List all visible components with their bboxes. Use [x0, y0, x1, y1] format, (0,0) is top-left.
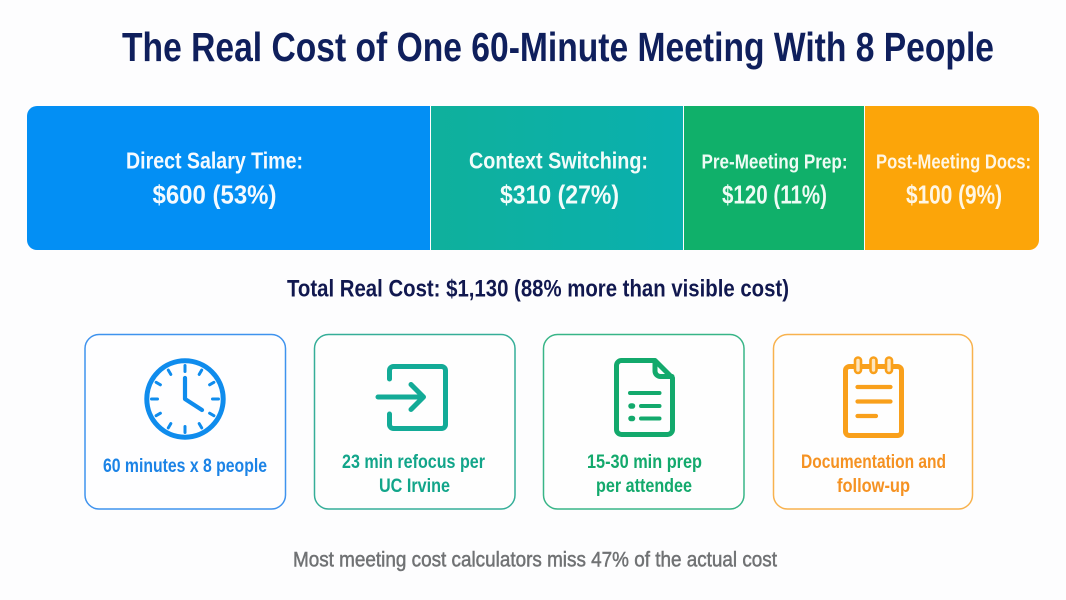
total real cost: Total Real Cost: $1,130 (88% more than visible cost) — [287, 276, 789, 302]
segment: direct salary time: $600 (53%) — [152, 180, 276, 210]
segment: post-meeting docs — [865, 106, 1039, 250]
icon: notepad — [846, 358, 902, 436]
card: 23 min refocus: UC Irvine — [379, 476, 450, 497]
icon: clock — [147, 361, 223, 437]
segment: context switching: $310 (27%) — [500, 180, 619, 210]
card: documentation: Documentation and — [801, 452, 946, 473]
card: 15-30 min prep: 15-30 min prep — [587, 452, 702, 473]
segment: pre-meeting prep — [684, 106, 864, 250]
card: 23 min refocus — [314, 334, 515, 509]
segment: post-meeting docs: $100 (9%) — [906, 180, 1002, 210]
segment: pre-meeting prep: $120 (11%) — [722, 180, 827, 210]
card: documentation: follow-up — [837, 476, 910, 497]
card: 60 minutes — [85, 334, 286, 509]
segment: context switching: Context Switching: — [469, 148, 648, 174]
card: documentation — [774, 334, 972, 509]
icon: arrow entering square — [378, 366, 446, 428]
segment: direct salary time — [27, 106, 430, 250]
icon: document — [616, 360, 672, 434]
stacked cost bar — [27, 106, 1039, 250]
segment: direct salary time: Direct Salary Time: — [126, 148, 303, 174]
card: 60 minutes: 60 minutes x 8 people — [103, 456, 267, 477]
card: 15-30 min prep — [544, 334, 744, 509]
segment: context switching — [431, 106, 683, 250]
segment: pre-meeting prep: Pre-Meeting Prep: — [702, 150, 848, 174]
card: 15-30 min prep: per attendee — [596, 476, 692, 497]
card: 23 min refocus: 23 min refocus per — [342, 452, 486, 473]
footer note: Most meeting cost calculators miss 47% of the actual cost — [293, 548, 777, 572]
segment: post-meeting docs: Post-Meeting Docs: — [876, 150, 1031, 174]
